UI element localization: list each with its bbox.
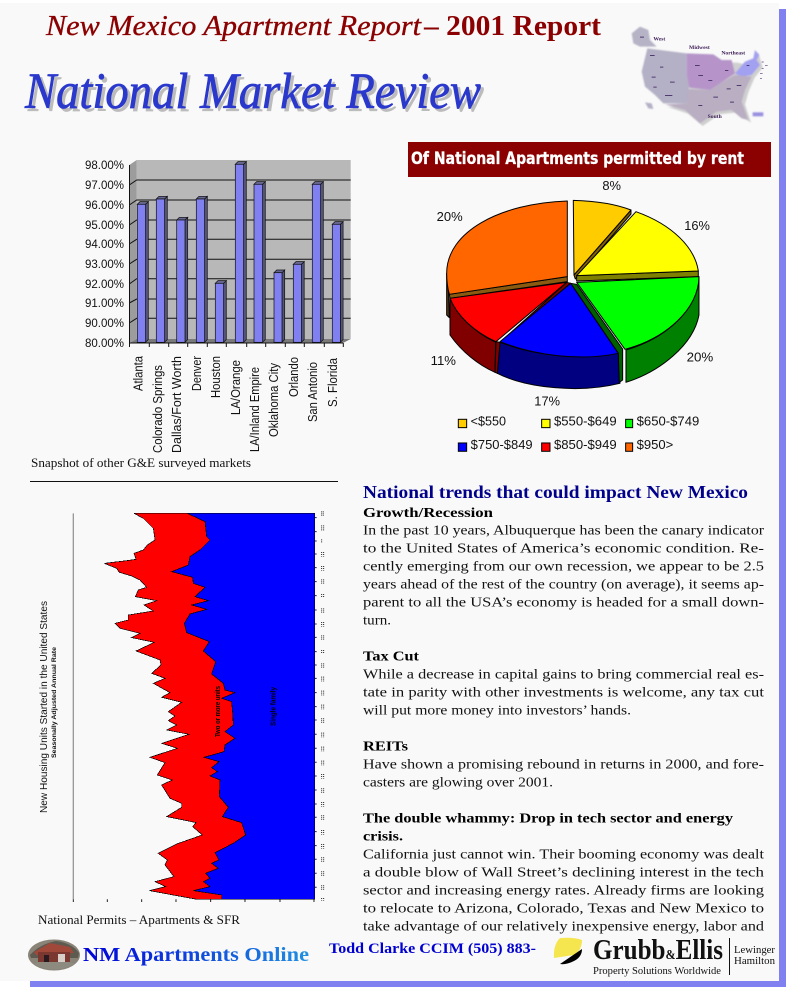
chart axes [73,511,324,902]
pie labels: 20% [687,351,713,365]
section: double whammy: to relocate to Arizona, Colorado, Texas and New Mexico to [363,902,764,917]
section: double whammy: sector and increasing energy rates. Already firms are looking [363,884,764,899]
pie chart: apartments permitted by rent: <$550 [471,415,506,429]
section: REITs [363,740,764,791]
pie labels: 11% [431,354,456,368]
icon: US regions map [632,27,768,126]
pie labels: 8% [602,179,621,193]
heading: National Market Review: National Market Review [27,67,484,123]
pie labels: 17% [534,395,560,409]
pie slices [447,200,699,389]
y axis labels: 92.00% [85,279,124,291]
panel header: apartments by rent [408,142,771,177]
title [45,11,602,42]
blue area: single family [172,513,315,899]
article heading: National trends that could impact New Mexico [363,482,748,502]
icon: US regions map: South [708,114,723,120]
section: growth and recession [363,506,764,629]
title: – 2001 Report [423,11,602,42]
logo: Grubb & Ellis: Grubb&Ellis [593,934,723,966]
pie labels: 20% [437,210,463,224]
icon: US regions map: Northeast [721,51,745,57]
section: double whammy: crisis. [363,830,403,845]
category labels: S. Florida [326,358,340,407]
logo: Grubb & Ellis: Lewinger [734,945,776,956]
section: double whammy [363,812,764,935]
section: growth and recession: In the past 10 years, Albuquerque has been the canary indicator [363,524,764,539]
series labels [215,686,278,737]
category labels: Atlanta [132,356,146,391]
y axis labels: 93.00% [85,259,124,271]
y axis title [38,601,58,813]
icon: house photo [28,940,80,970]
section: tax cut: Tax Cut [363,650,419,665]
category labels: San Antonio [306,362,320,422]
series labels: Single family [270,687,278,726]
y axis labels: 98.00% [85,160,124,172]
section: REITs: REITs [363,740,409,755]
pie labels [431,179,713,409]
y axis title: Seasonally Adjusted Annual Rate [51,647,58,758]
icon: Grubb & Ellis logo mark [554,938,582,964]
section: tax cut: tate in parity with other investments is welcome, any tax cut [363,686,764,701]
category labels: LA/Inland Empire [248,367,262,452]
category labels [132,356,340,453]
bars [137,162,343,342]
contact: Todd Clarke CCIM (505) 883- [329,941,536,957]
y axis labels: 91.00% [85,298,124,310]
category labels: Orlando [287,357,301,397]
caption: national permits: National Permits – Apartments & SFR [38,912,240,927]
y axis labels: 90.00% [85,318,124,330]
y axis labels: 94.00% [85,239,124,251]
section: growth and recession: years ahead of the rest of the country (on average), it seems ap- [363,578,764,593]
bar chart: occupancy by surveyed market [85,160,351,453]
section: tax cut [363,650,764,719]
logo: Grubb & Ellis: Property Solutions Worldwide [593,966,721,977]
section: tax cut: will put more money into investors’ hands. [363,704,631,719]
y axis title: New Housing Units Started in the United States [38,601,50,813]
pie chart: apartments permitted by rent: $950> [637,438,673,452]
category labels: LA/Orange [229,360,243,415]
icon: US regions map: Midwest [689,45,710,51]
title: New Mexico Apartment Report [45,11,422,42]
section: tax cut: While a decrease in capital gains to bring commercial real es- [363,668,764,683]
pie chart: apartments permitted by rent: $650-$749 [637,415,699,429]
category labels: Houston [209,356,223,398]
section: double whammy: California just cannot win. Their booming economy was dealt [363,848,764,863]
area chart: national permits [38,511,324,902]
article: national trends [363,482,764,935]
section: growth and recession: parent to all the USA’s economy is headed for a small down- [363,596,764,611]
category labels: Denver [190,356,204,391]
section: REITs: Have shown a promising rebound in returns in 2000, and fore- [363,758,764,773]
series labels: Two or more units [215,686,222,737]
y axis labels: 97.00% [85,180,124,192]
chart walls [129,160,351,347]
category labels: Colorado Springs [151,365,165,453]
heading: National Market Review: National Market Review [24,64,481,120]
section: double whammy: The double whammy: Drop in tech sector and energy [363,812,733,827]
footer brand: NM Apartments Online: NM Apartments Online [83,944,309,966]
section: growth and recession: Growth/Recession [363,506,493,521]
caption: surveyed markets: Snapshot of other G&E surveyed markets [31,455,251,470]
icon: US regions map: West [653,36,665,42]
section: REITs: casters are glowing over 2001. [363,776,553,791]
section: growth and recession: turn. [363,614,391,629]
pie labels: 16% [684,219,710,233]
pie chart: apartments permitted by rent: $550-$649 [554,415,617,429]
y axis labels [85,160,124,350]
section: double whammy: a double blow of Wall Street’s declining interest in the tech [363,866,764,881]
y axis labels: 80.00% [85,338,124,350]
section: growth and recession: cently emerging from our own recession, we appear to be 2.5 [363,560,764,575]
pie chart: apartments permitted by rent [431,179,713,452]
y axis labels: 95.00% [85,220,124,232]
legend [458,419,633,451]
section: double whammy: take advantage of our relatively inexpensive energy, labor and [363,920,764,935]
pie chart: apartments permitted by rent: $850-$949 [554,438,617,452]
logo: Grubb & Ellis [593,934,776,977]
y axis labels: 96.00% [85,200,124,212]
category labels: Oklahoma City [267,362,281,437]
pie chart: apartments permitted by rent: $750-$849 [471,438,533,452]
section: growth and recession: to the United States of America’s economic condition. Re- [363,542,764,557]
red area: apartments [104,513,315,899]
logo: Grubb & Ellis: Hamilton [734,956,775,967]
category labels: Dallas/Fort Worth [170,356,184,453]
